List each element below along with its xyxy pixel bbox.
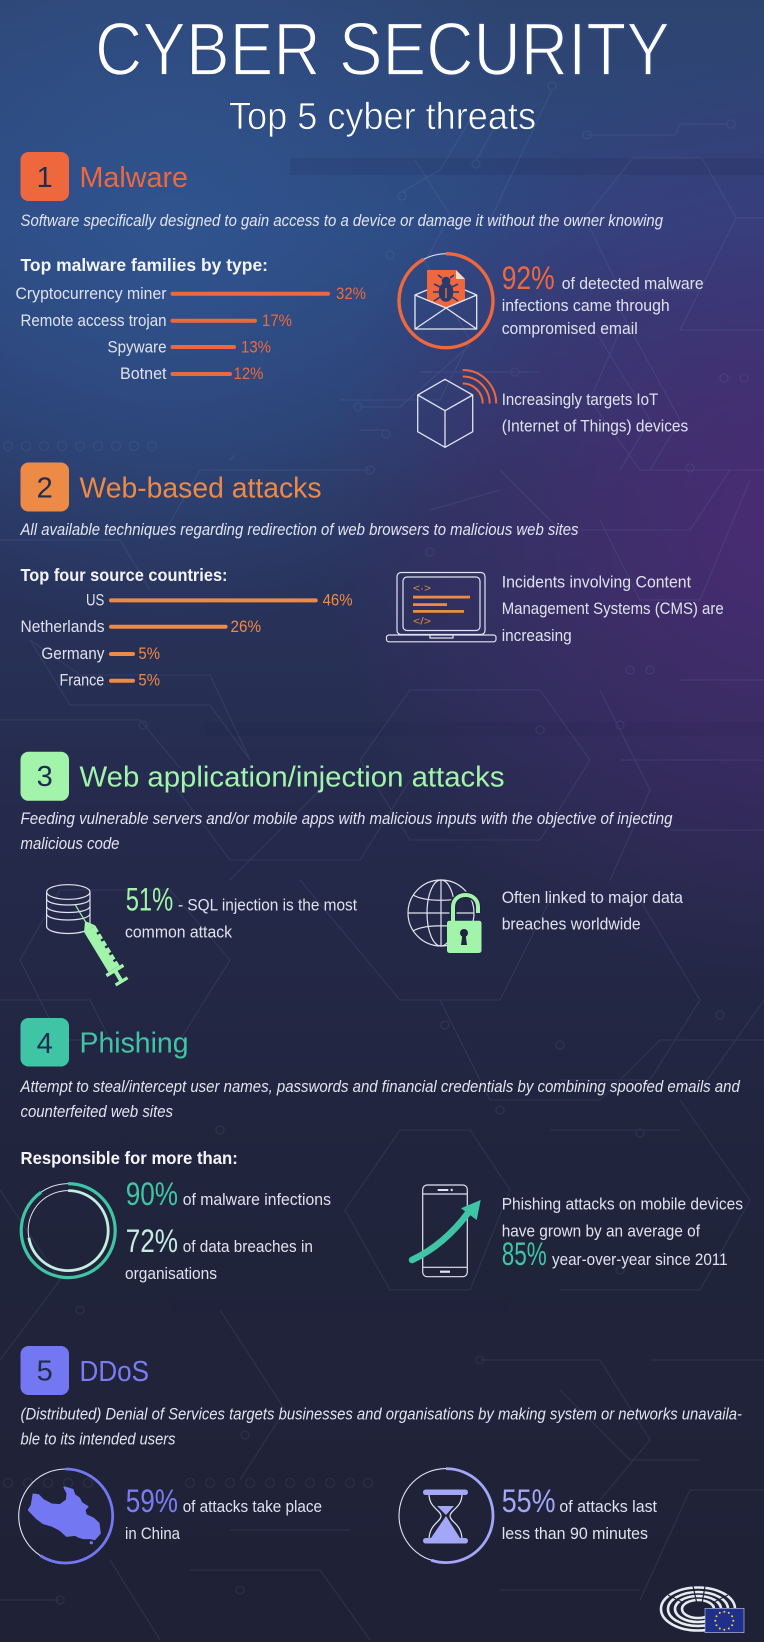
description: counterfeited web sites [20, 1103, 173, 1121]
heading: malware: Malware [80, 162, 188, 194]
text: CMS: Incidents involving Content [502, 572, 691, 592]
description [20, 1405, 742, 1449]
badge: 4 [20, 1018, 69, 1066]
bar chart: malware families [16, 284, 366, 383]
badge: 1 [20, 152, 69, 201]
chart heading: Responsible for more than: [20, 1148, 238, 1168]
heading: DDoS: DDoS [80, 1356, 149, 1388]
badge: 3: 3 [37, 761, 53, 793]
stat: 92% email: 92% [502, 260, 555, 296]
stat: 55% duration: of attacks last [559, 1497, 657, 1516]
panel: phishing [20, 1018, 743, 1283]
chart heading: Top four source countries: [20, 565, 228, 585]
subtitle: Top 5 cyber threats [229, 96, 536, 138]
bar chart: source countries: 46% [323, 590, 353, 609]
text: IoT: Increasingly targets IoT [502, 390, 658, 409]
bar chart: source countries: 26% [230, 617, 261, 636]
heading: phishing: Phishing [80, 1027, 188, 1059]
text: mobile phishing growth: have grown by an average of [502, 1222, 700, 1241]
badge: 2 [20, 462, 69, 512]
description [20, 810, 673, 853]
icon: infected email in 92% ring [399, 254, 493, 348]
icon: hourglass in 55% ring [399, 1469, 493, 1563]
bar chart: source countries: 5% [138, 644, 160, 663]
bar chart: malware families: 13% [241, 338, 271, 356]
stat: 92% email: of detected malware [562, 274, 704, 293]
description [20, 1078, 741, 1121]
badge: 5 [20, 1346, 69, 1395]
bar chart: malware families: Botnet [120, 364, 167, 383]
stat: 90% and 72%: 90% [126, 1176, 178, 1212]
badge: 4: 4 [37, 1028, 53, 1060]
text: mobile phishing growth: Phishing attacks on mobile devices [502, 1195, 743, 1214]
description: All available techniques regarding redirection of web browsers to malicious web sites [20, 521, 579, 539]
bar chart: source countries: US [86, 590, 104, 609]
logo: European Parliament [661, 1586, 744, 1633]
bar chart: malware families: Cryptocurrency miner [16, 284, 167, 303]
text: IoT [502, 390, 688, 436]
stat: 90% and 72%: of data breaches in [183, 1237, 313, 1256]
stat: 59% China: of attacks take place [183, 1497, 322, 1516]
bar chart: source countries: 5% [138, 671, 160, 690]
stat: 92% email [502, 260, 704, 338]
stat: 55% duration: 55% [502, 1483, 556, 1519]
text: CMS [502, 572, 724, 645]
bar chart: source countries: Germany [41, 644, 105, 663]
text: CMS: increasing [502, 626, 572, 645]
stat: 90% and 72%: of malware infections [183, 1190, 331, 1209]
text: data breaches [502, 888, 683, 934]
stat: 92% email: infections came through [502, 296, 670, 315]
description: malicious code [20, 835, 120, 853]
title: CYBER SECURITY [95, 7, 670, 91]
icon: laptop with code: <·> [413, 582, 431, 594]
icon: globe with padlock [408, 880, 482, 953]
bar chart: malware families: 17% [262, 311, 292, 330]
bar chart: malware families: Spyware [108, 338, 166, 356]
icon: phone with rising arrow [412, 1185, 481, 1277]
bar chart: source countries [20, 590, 353, 690]
heading: web-based attacks: Web-based attacks [80, 472, 322, 504]
stat: 59% China [125, 1483, 322, 1543]
text: mobile phishing growth: year-over-year since 2011 [552, 1250, 728, 1269]
description: ble to its intended users [20, 1431, 176, 1449]
description: Software specifically designed to gain access to a device or damage it without the owner knowing [20, 212, 664, 230]
stat: 55% duration: less than 90 minutes [502, 1524, 648, 1543]
icon: China map in 59% ring [19, 1469, 113, 1563]
panel: web-based attacks [20, 462, 724, 690]
stat: 92% email: compromised email [502, 319, 638, 338]
stat: 51% SQL injection: - SQL injection is the most [178, 896, 357, 915]
panel: malware [16, 152, 704, 447]
icon: IoT cube [418, 370, 496, 447]
text: mobile phishing growth: 85% [502, 1236, 547, 1272]
description: Feeding vulnerable servers and/or mobile apps with malicious inputs with the objective of injecting [20, 810, 673, 828]
badge: 2: 2 [37, 472, 53, 504]
panel: web application/injection attacks [20, 752, 683, 988]
bar chart: malware families: 32% [336, 284, 366, 303]
stat: 90% and 72%: organisations [125, 1264, 217, 1283]
panel: DDoS [19, 1346, 742, 1563]
stat: 51% SQL injection: 51% [126, 882, 173, 918]
stat: 59% China: 59% [126, 1483, 178, 1519]
chart: double ring 90% and 72% [21, 1184, 115, 1278]
text: data breaches: breaches worldwide [502, 915, 641, 934]
badge: 1: 1 [37, 162, 53, 194]
stat: 51% SQL injection [125, 882, 357, 942]
stat: 55% duration [502, 1483, 657, 1543]
text: IoT: (Internet of Things) devices [502, 417, 688, 436]
icon: laptop with code [386, 572, 496, 642]
stat: 51% SQL injection: common attack [125, 922, 232, 942]
chart heading: Top malware families by type: [20, 255, 268, 275]
stat: 90% and 72% [125, 1176, 331, 1283]
heading: web application: Web application/injection attacks [80, 762, 504, 794]
icon: laptop with code: </> [413, 616, 431, 628]
icon: database and syringe [47, 885, 131, 988]
bar chart: malware families: 12% [234, 364, 264, 383]
text: data breaches: Often linked to major data [502, 888, 683, 907]
bar chart: source countries: France [60, 671, 104, 690]
bar chart: malware families: Remote access trojan [20, 311, 166, 330]
bar chart: source countries: Netherlands [20, 617, 104, 636]
badge: 3 [20, 752, 69, 801]
text: CMS: Management Systems (CMS) are [502, 599, 724, 618]
text: mobile phishing growth [502, 1195, 743, 1272]
stat: 90% and 72%: 72% [126, 1223, 178, 1259]
stat: 59% China: in China [125, 1524, 180, 1543]
badge: 5: 5 [37, 1356, 53, 1388]
